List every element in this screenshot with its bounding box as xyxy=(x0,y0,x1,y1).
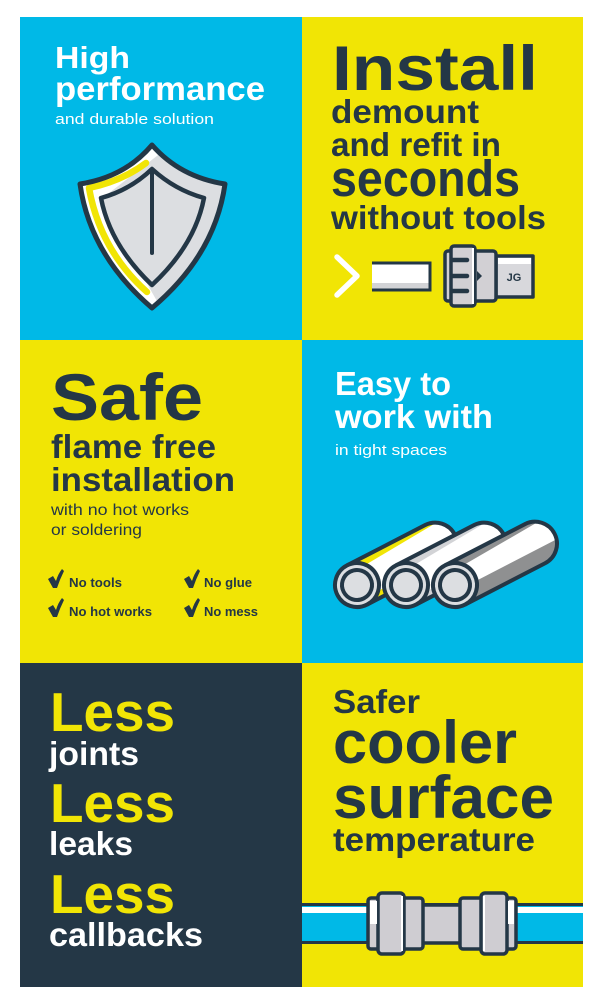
heading: install without tools: without tools xyxy=(330,199,546,236)
heading: high performance xyxy=(55,40,265,107)
icon: pipe end xyxy=(372,263,430,290)
text: less callbacks: Less xyxy=(50,863,175,925)
heading: install without tools: seconds xyxy=(331,150,520,207)
checklist: No glue xyxy=(204,575,252,590)
heading: safe flame free installation: Safe xyxy=(51,360,203,434)
text: less leaks: Less xyxy=(50,772,175,834)
heading: safer cooler surface temperature: Safer xyxy=(333,683,420,720)
icon: shield xyxy=(78,142,228,311)
panel: high performance xyxy=(20,17,302,340)
heading: safe flame free installation: flame free xyxy=(51,428,216,465)
heading: easy to work with: Easy to xyxy=(335,365,451,402)
heading: safe flame free installation: installation xyxy=(51,461,235,498)
panel: less joints leaks callbacks xyxy=(20,663,302,987)
text: no hot works or soldering: or soldering xyxy=(51,522,142,539)
text: no hot works or soldering xyxy=(50,502,189,539)
heading: install without tools: and refit in xyxy=(331,126,501,163)
checklist: No mess xyxy=(204,604,258,619)
text: no hot works or soldering: with no hot works xyxy=(50,502,189,519)
text: less callbacks: callbacks xyxy=(49,916,203,953)
checklist: No tools xyxy=(69,575,122,590)
panel: easy to work with xyxy=(302,340,583,663)
heading: safer cooler surface temperature: cooler xyxy=(333,709,517,776)
text: less joints: Less xyxy=(50,681,175,743)
icon: three pipes xyxy=(327,514,565,615)
icon: pipe with connector xyxy=(302,893,583,954)
icon: push-fit connector xyxy=(445,246,533,306)
panel: safe xyxy=(20,340,302,663)
panel: safer cooler surface xyxy=(302,663,583,987)
heading: safer cooler surface temperature xyxy=(333,683,554,858)
heading: install without tools: Install xyxy=(332,34,538,104)
heading: high performance: performance xyxy=(55,70,265,107)
text: less joints xyxy=(48,681,175,772)
heading: high performance: High xyxy=(55,40,130,75)
text: less leaks: leaks xyxy=(49,825,133,862)
icon: chevron arrow xyxy=(337,257,357,295)
heading: easy to work with: work with xyxy=(334,398,493,435)
heading: safer cooler surface temperature: surface xyxy=(333,764,554,831)
checklist xyxy=(48,569,258,619)
checklist: No hot works xyxy=(69,604,152,619)
panel: install xyxy=(302,17,583,340)
text: less callbacks xyxy=(49,863,203,953)
heading: install without tools: demount xyxy=(331,93,479,130)
icon: push-fit connector: JG xyxy=(507,272,521,284)
subheading: durable solution: and durable solution xyxy=(55,111,214,128)
heading: safe flame free installation xyxy=(51,360,235,498)
subheading: tight spaces: in tight spaces xyxy=(335,442,447,459)
heading: easy to work with xyxy=(334,365,493,435)
text: less joints: joints xyxy=(48,735,139,772)
heading: install without tools xyxy=(330,34,546,236)
heading: safer cooler surface temperature: temperature xyxy=(333,821,535,858)
text: less leaks xyxy=(49,772,175,862)
